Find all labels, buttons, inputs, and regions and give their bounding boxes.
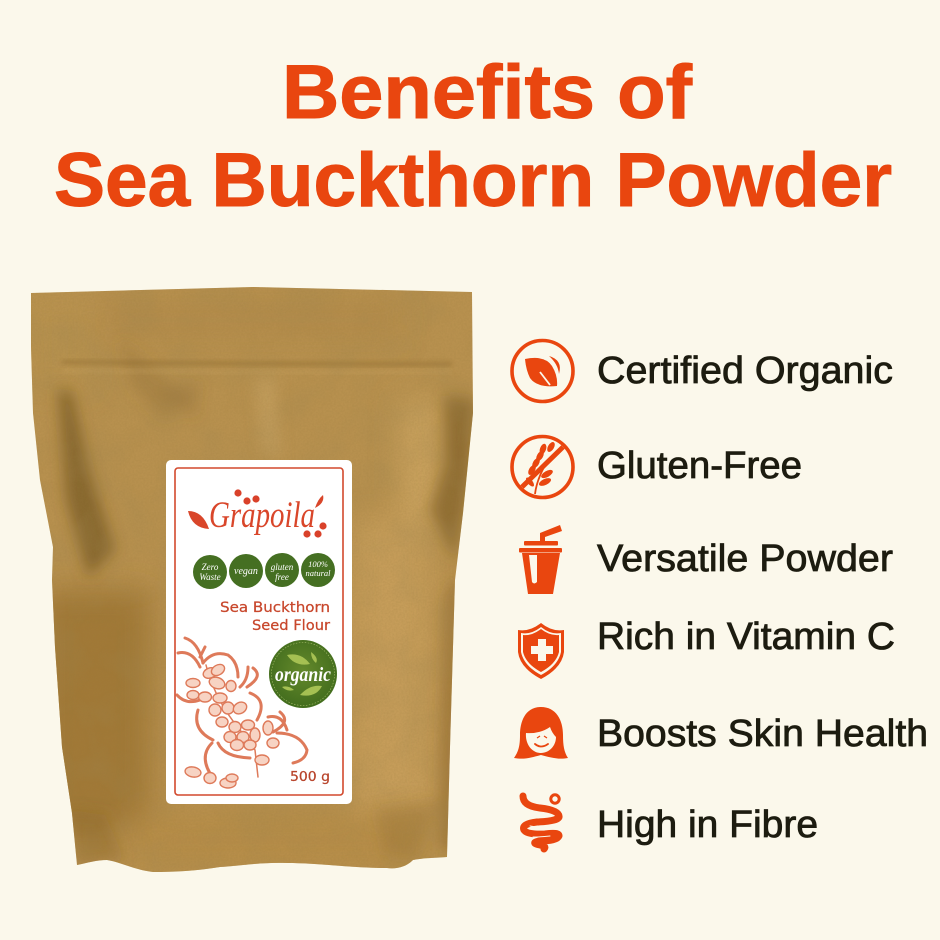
- brand logo: [188, 489, 327, 538]
- benefit: gluten-free: [512, 436, 802, 498]
- icon: cup with straw: [519, 525, 562, 594]
- benefit: rich in vitamin c: Rich in Vitamin C: [597, 616, 895, 658]
- title: Sea Buckthorn Powder: [54, 138, 892, 223]
- icon: crossed wheat: [512, 436, 573, 498]
- pouch tonal shading: [30, 300, 440, 870]
- benefit: high in fibre: High in Fibre: [597, 804, 818, 846]
- benefit: boosts skin health: [514, 707, 928, 759]
- organic badge: organic: [275, 664, 331, 686]
- brand logo: Grapoila: [209, 495, 315, 536]
- title: [54, 50, 892, 223]
- certification badges: natural: [305, 568, 331, 578]
- product name: [220, 600, 330, 634]
- title: Benefits of: [282, 50, 693, 135]
- certification badges: free: [275, 572, 289, 582]
- certification badges: vegan: [234, 566, 258, 577]
- benefit: gluten-free: Gluten-Free: [597, 445, 802, 487]
- pouch body: [20, 280, 480, 880]
- benefit: rich in vitamin c: [518, 616, 895, 679]
- product name: Seed Flour: [252, 618, 330, 634]
- net weight: 500 g: [290, 770, 330, 785]
- certification badges: 100%: [308, 559, 328, 569]
- pouch zipper seam: [62, 362, 452, 364]
- label: [166, 460, 352, 804]
- benefit: versatile powder: [519, 525, 893, 594]
- certification badges: Zero: [202, 562, 219, 572]
- product pouch: [20, 280, 480, 880]
- product name: Sea Buckthorn: [220, 600, 330, 616]
- icon: shield with cross: [518, 623, 564, 679]
- paper texture: [52, 532, 418, 720]
- organic badge: [269, 640, 337, 708]
- icon: leaf: [512, 340, 573, 402]
- benefit: boosts skin health: Boosts Skin Health: [597, 713, 928, 755]
- benefit: high in fibre: [523, 795, 818, 849]
- sea buckthorn illustration: [177, 638, 307, 788]
- benefit: certified organic: Certified Organic: [597, 350, 893, 392]
- icon: woman face: [514, 707, 568, 759]
- pouch gusset folds: [58, 340, 475, 865]
- label card: [166, 460, 352, 804]
- benefit: certified organic: [512, 340, 893, 402]
- benefit: versatile powder: Versatile Powder: [597, 538, 893, 580]
- certification badges: gluten: [271, 562, 294, 572]
- benefits list: [512, 340, 928, 849]
- icon: intestines: [523, 795, 559, 849]
- certification badges: Waste: [199, 572, 221, 582]
- certification badges: [193, 553, 335, 589]
